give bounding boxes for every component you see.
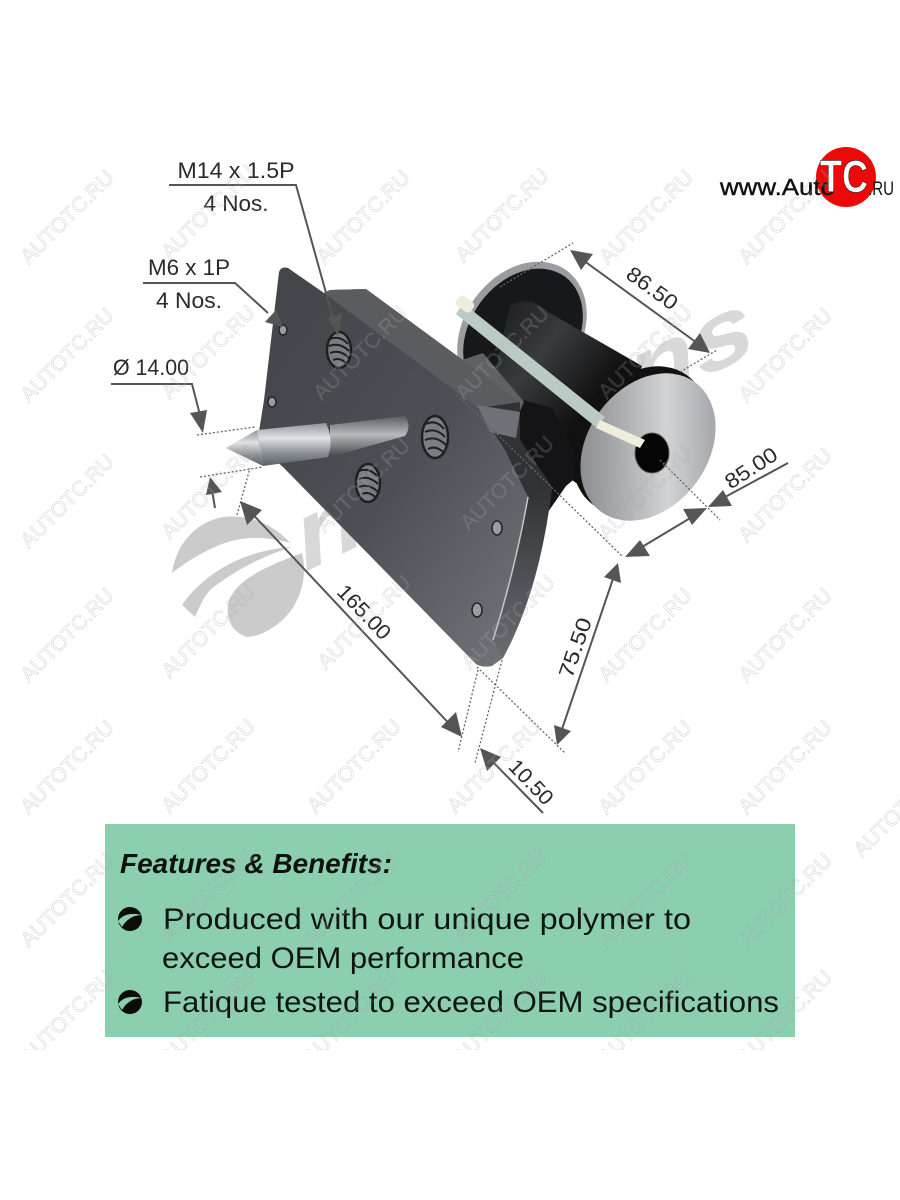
brand logo: www.AutoTC.ru: .RU — [868, 179, 894, 200]
repeating AUTOTC.RU watermark: AUTOTC.RU — [16, 166, 119, 269]
repeating AUTOTC.RU watermark: AUTOTC.RU — [734, 584, 837, 687]
repeating AUTOTC.RU watermark: AUTOTC.RU — [157, 301, 260, 404]
panel: features and benefits — [105, 824, 795, 1037]
repeating AUTOTC.RU watermark: AUTOTC.RU — [595, 166, 698, 269]
product: side bracket — [456, 353, 524, 432]
repeating AUTOTC.RU watermark: AUTOTC.RU — [451, 302, 554, 405]
product: pivot block — [516, 398, 585, 512]
repeating AUTOTC.RU watermark: AUTOTC.RU — [16, 849, 119, 952]
repeating AUTOTC.RU watermark: AUTOTC.RU — [299, 966, 402, 1069]
repeating AUTOTC.RU watermark: AUTOTC.RU — [157, 580, 260, 683]
callout: M14 x 1.5P: 4 Nos. — [204, 191, 268, 216]
product: mounting plate — [258, 268, 552, 667]
dimension: 85.00 — [625, 443, 788, 557]
callout: M14 x 1.5P: M14 x 1.5P — [178, 158, 294, 183]
repeating AUTOTC.RU watermark: AUTOTC.RU — [16, 304, 119, 407]
repeating AUTOTC.RU watermark: AUTOTC.RU — [594, 966, 697, 1069]
brand logo: www.AutoTC.ru — [719, 147, 894, 207]
repeating AUTOTC.RU watermark: AUTOTC.RU — [457, 571, 560, 674]
repeating AUTOTC.RU watermark: AUTOTC.RU — [157, 161, 260, 264]
dimension: 10.50: 10.50 — [504, 755, 558, 810]
repeating AUTOTC.RU watermark: AUTOTC.RU — [594, 849, 697, 952]
dimension: 10.50 — [480, 748, 558, 813]
repeating AUTOTC.RU watermark: AUTOTC.RU — [451, 164, 554, 267]
repeating AUTOTC.RU watermark: AUTOTC.RU — [299, 849, 402, 952]
callout: M6 x 1P — [143, 255, 283, 327]
repeating AUTOTC.RU watermark: AUTOTC.RU — [594, 716, 697, 819]
repeating AUTOTC.RU watermark: AUTOTC.RU — [303, 715, 406, 818]
repeating AUTOTC.RU watermark: AUTOTC.RU — [456, 432, 559, 535]
repeating AUTOTC.RU watermark: AUTOTC.RU — [734, 166, 837, 269]
dimension: 75.50 — [554, 563, 621, 745]
repeating AUTOTC.RU watermark: AUTOTC.RU — [449, 966, 552, 1069]
brand logo: www.AutoTC.ru: www.Auto — [719, 174, 835, 200]
text: first feature — [162, 903, 691, 975]
callout: diameter 14.00: Ø 14.00 — [113, 355, 189, 380]
repeating AUTOTC.RU watermark: AUTOTC.RU — [449, 844, 552, 947]
product: back flange of bushing — [430, 236, 614, 428]
repeating AUTOTC.RU watermark: AUTOTC.RU — [594, 301, 697, 404]
repeating AUTOTC.RU watermark: AUTOTC.RU — [313, 571, 416, 674]
repeating AUTOTC.RU watermark — [16, 161, 900, 1069]
text: first feature: exceed OEM performance — [162, 942, 524, 975]
repeating AUTOTC.RU watermark: AUTOTC.RU — [16, 716, 119, 819]
callout: diameter 14.00 — [111, 355, 222, 508]
threaded hole: right — [422, 416, 448, 458]
repeating AUTOTC.RU watermark: AUTOTC.RU — [16, 584, 119, 687]
callout: M6 x 1P: M6 x 1P — [148, 255, 230, 280]
text: first feature: Produced with our unique polymer to — [163, 903, 691, 936]
repeating AUTOTC.RU watermark: AUTOTC.RU — [734, 716, 837, 819]
repeating AUTOTC.RU watermark: AUTOTC.RU — [594, 584, 697, 687]
background logo: swoosh — [172, 517, 304, 637]
repeating AUTOTC.RU watermark: AUTOTC.RU — [312, 434, 415, 537]
callout: M6 x 1P: 4 Nos. — [156, 288, 222, 313]
dimension: 85.00: 85.00 — [721, 443, 782, 494]
repeating AUTOTC.RU watermark: AUTOTC.RU — [16, 450, 119, 553]
heading: features and benefits: Features & Benefits: — [120, 848, 392, 879]
threaded hole: upper — [327, 332, 351, 368]
dotted extension lines — [197, 243, 720, 763]
background logo: wordmark: nlansons — [282, 269, 764, 591]
bullet icon: first feature — [118, 907, 142, 931]
dimension: 165.00 — [240, 501, 462, 737]
product: cylinder body — [492, 301, 642, 490]
brand logo: www.AutoTC.ru: TC — [820, 151, 868, 202]
wordmark shading on plate: nlansons — [282, 269, 764, 591]
repeating AUTOTC.RU watermark: AUTOTC.RU — [157, 966, 260, 1069]
repeating AUTOTC.RU watermark: AUTOTC.RU — [157, 844, 260, 947]
threaded hole: lower — [356, 464, 380, 502]
dimension: 165.00: 165.00 — [332, 580, 395, 645]
repeating AUTOTC.RU watermark: AUTOTC.RU — [734, 304, 837, 407]
small bolts on plate — [268, 325, 502, 617]
repeating AUTOTC.RU watermark: AUTOTC.RU — [157, 441, 260, 544]
product: locating pin — [226, 416, 408, 466]
repeating AUTOTC.RU watermark: AUTOTC.RU — [312, 166, 415, 269]
bullet icon: second feature — [118, 990, 142, 1014]
repeating AUTOTC.RU watermark: AUTOTC.RU — [16, 966, 119, 1069]
dimension: 86.50 — [570, 250, 710, 353]
dimension: 86.50: 86.50 — [622, 262, 682, 315]
repeating AUTOTC.RU watermark: AUTOTC.RU — [734, 849, 837, 952]
cable tie — [454, 294, 645, 448]
repeating AUTOTC.RU watermark: AUTOTC.RU — [734, 966, 837, 1069]
text: second feature: Fatique tested to exceed OEM specifications — [163, 986, 779, 1019]
dimension: 75.50: 75.50 — [555, 615, 597, 681]
repeating AUTOTC.RU watermark: AUTOTC.RU — [309, 302, 412, 405]
repeating AUTOTC.RU watermark: AUTOTC.RU — [157, 715, 260, 818]
repeating AUTOTC.RU watermark: AUTOTC.RU — [734, 444, 837, 547]
repeating AUTOTC.RU watermark: AUTOTC.RU — [443, 715, 546, 818]
callout: M14 x 1.5P — [169, 158, 343, 336]
product: front of bushing with disc — [544, 340, 744, 547]
repeating AUTOTC.RU watermark: AUTOTC.RU — [594, 442, 697, 545]
